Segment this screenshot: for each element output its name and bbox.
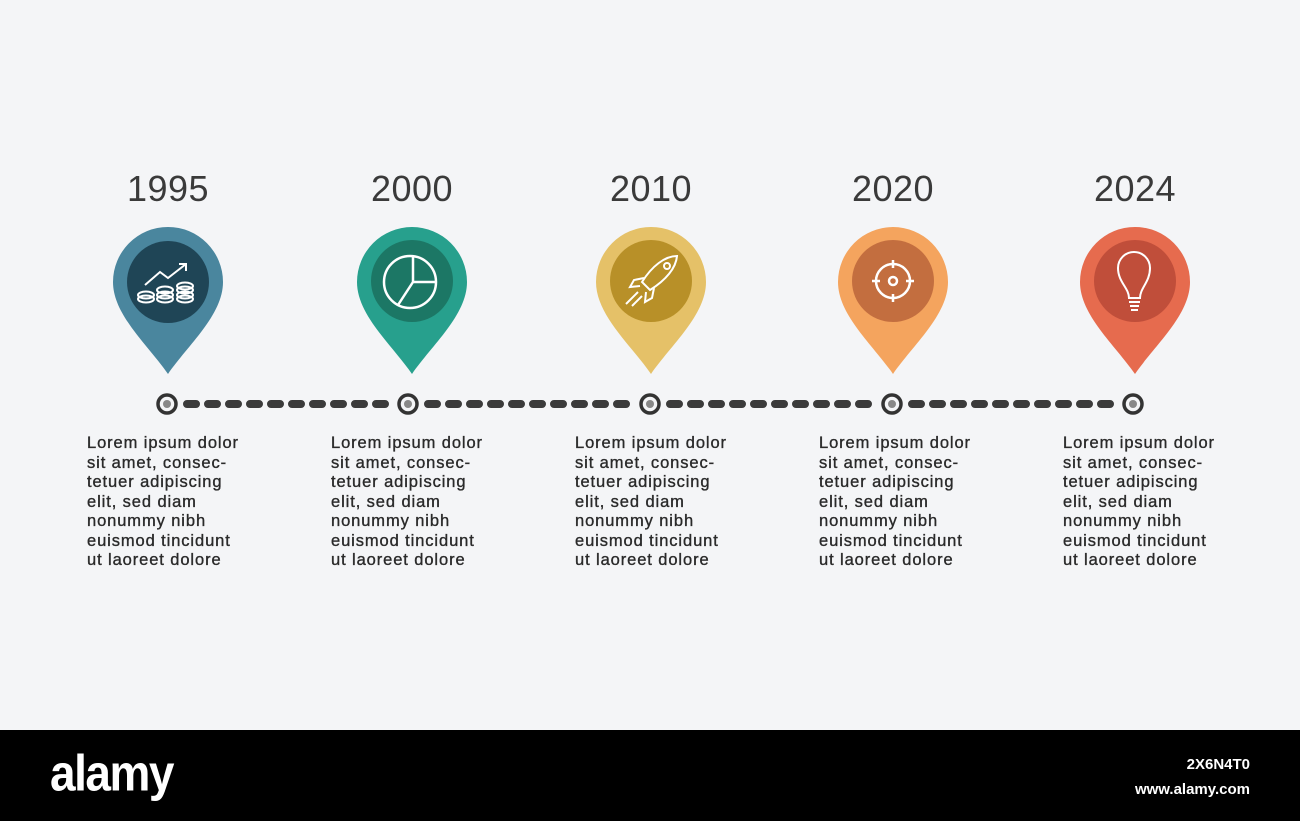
footer id and url: 2X6N4T0 [1187, 756, 1250, 773]
text: 2024: elit, sed diam [1063, 492, 1173, 510]
text: 1995 [87, 434, 239, 569]
pin: 1995 [113, 227, 223, 374]
year: 2010: 2010 [610, 168, 692, 209]
text: 2000: elit, sed diam [331, 492, 441, 510]
text: 1995: elit, sed diam [87, 492, 197, 510]
dashed timeline [158, 395, 1142, 413]
text: 2010: euismod tincidunt [575, 532, 719, 550]
text: 2010: Lorem ipsum dolor [575, 434, 727, 452]
text: 2000: Lorem ipsum dolor [331, 434, 483, 452]
footer logo: alamy [50, 744, 173, 802]
text: 1995: euismod tincidunt [87, 532, 231, 550]
text: 2024: tetuer adipiscing [1063, 473, 1198, 491]
year: 2020: 2020 [852, 168, 934, 209]
pin: 2024 [1080, 227, 1190, 374]
text: 1995: ut laoreet dolore [87, 551, 222, 569]
text: 2024: Lorem ipsum dolor [1063, 434, 1215, 452]
text: 2000: tetuer adipiscing [331, 473, 466, 491]
text: 2020: tetuer adipiscing [819, 473, 954, 491]
pin: 2010 [596, 227, 706, 374]
text: 2020: elit, sed diam [819, 492, 929, 510]
pin: 2000 [357, 227, 467, 374]
text: 2000: sit amet, consec- [331, 454, 471, 472]
icon: light bulb [1118, 252, 1150, 310]
year: 1995: 1995 [127, 168, 209, 209]
text: 2020: Lorem ipsum dolor [819, 434, 971, 452]
text: 2000 [331, 434, 483, 569]
footer bar [0, 730, 1300, 821]
icon: target [872, 260, 914, 302]
text: 2024: nonummy nibh [1063, 512, 1182, 530]
footer id and url: www.alamy.com [1135, 781, 1250, 798]
text: 2010: tetuer adipiscing [575, 473, 710, 491]
text: 2010 [575, 434, 727, 569]
text: 2024: euismod tincidunt [1063, 532, 1207, 550]
text: 2010: ut laoreet dolore [575, 551, 710, 569]
text: 1995: Lorem ipsum dolor [87, 434, 239, 452]
year: 2024: 2024 [1094, 168, 1176, 209]
text: 2020: sit amet, consec- [819, 454, 959, 472]
year: 2000: 2000 [371, 168, 453, 209]
icon: pie chart [384, 256, 437, 308]
text: 2020: ut laoreet dolore [819, 551, 954, 569]
text: 2020: nonummy nibh [819, 512, 938, 530]
text: 2000: nonummy nibh [331, 512, 450, 530]
text: 2010: elit, sed diam [575, 492, 685, 510]
text: 2000: euismod tincidunt [331, 532, 475, 550]
text: 1995: tetuer adipiscing [87, 473, 222, 491]
text: 2024: ut laoreet dolore [1063, 551, 1198, 569]
text: 1995: sit amet, consec- [87, 454, 227, 472]
footer id and url [1135, 756, 1250, 798]
icon: rocket [626, 256, 677, 306]
text: 2020: euismod tincidunt [819, 532, 963, 550]
pin: 2020 [838, 227, 948, 374]
text: 2020 [819, 434, 971, 569]
text: 1995: nonummy nibh [87, 512, 206, 530]
text: 2010: sit amet, consec- [575, 454, 715, 472]
text: 2000: ut laoreet dolore [331, 551, 466, 569]
text: 2024 [1063, 434, 1215, 569]
text: 2024: sit amet, consec- [1063, 454, 1203, 472]
text: 2010: nonummy nibh [575, 512, 694, 530]
icon: growth coins [138, 264, 193, 302]
